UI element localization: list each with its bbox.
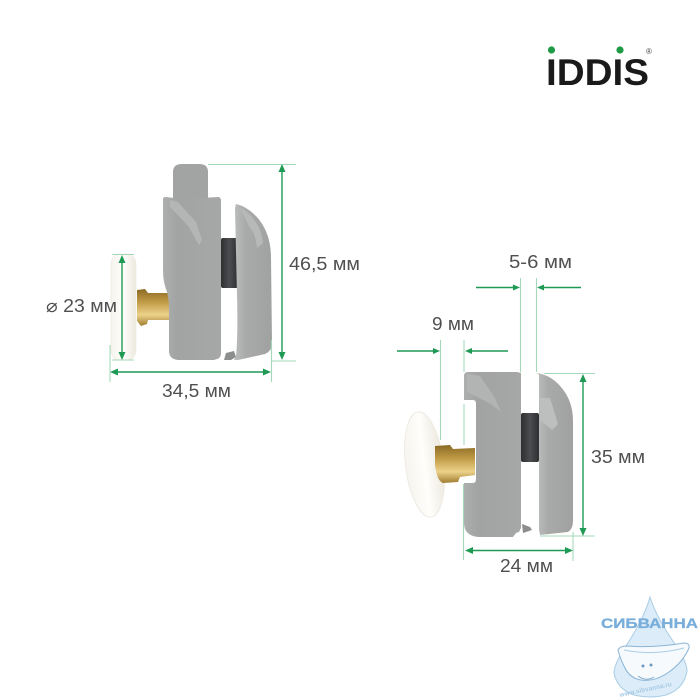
brand name: СИБВАННА [601, 615, 698, 631]
dimension: 5-6 mm: 5-6 мм [509, 252, 572, 272]
cap [537, 373, 573, 535]
watermark: Sibvanna [601, 597, 698, 699]
brass axle [435, 445, 475, 483]
logo: IDDIS: ® [646, 47, 652, 56]
roller: angled view [399, 372, 573, 537]
dimension: 46,5 mm [208, 164, 360, 361]
dimension: 9 mm: 9 мм [432, 314, 474, 334]
dimension: 9 mm [397, 314, 508, 445]
dimension: 34,5 mm [110, 340, 272, 401]
dimension: 24 mm: 24 мм [500, 556, 553, 576]
dimension: 24 mm [464, 484, 573, 576]
peg [173, 164, 208, 201]
dimension: 34,5 mm: 34,5 мм [162, 381, 231, 401]
body [464, 372, 521, 537]
cap highlight [540, 398, 558, 430]
body [163, 197, 221, 360]
body highlight [467, 374, 501, 412]
clip [522, 524, 532, 533]
dimension: 35 mm: 35 мм [591, 447, 645, 467]
wheel [111, 254, 136, 360]
dimension: diameter 23 mm [46, 254, 134, 360]
dimension: 35 mm [540, 374, 645, 536]
tub [618, 643, 689, 680]
dimension: 46,5 mm: 46,5 мм [289, 254, 360, 274]
dimension: 5-6 mm [476, 252, 581, 372]
body highlight [170, 200, 202, 245]
black spacer [221, 238, 238, 288]
cap highlight [240, 208, 263, 248]
roller: side view [111, 164, 272, 360]
cap [234, 204, 272, 360]
face [638, 676, 654, 679]
dimension: diameter 23 mm: ⌀ 23 мм [46, 296, 117, 316]
wheel [399, 410, 450, 519]
clip [224, 351, 236, 360]
logo: IDDIS: IDDIS [546, 52, 649, 93]
brass axle [137, 289, 170, 326]
url: www.sibvanna.ru [618, 681, 672, 699]
drop [614, 597, 687, 697]
tub rim [624, 648, 684, 653]
black spacer [521, 413, 539, 462]
